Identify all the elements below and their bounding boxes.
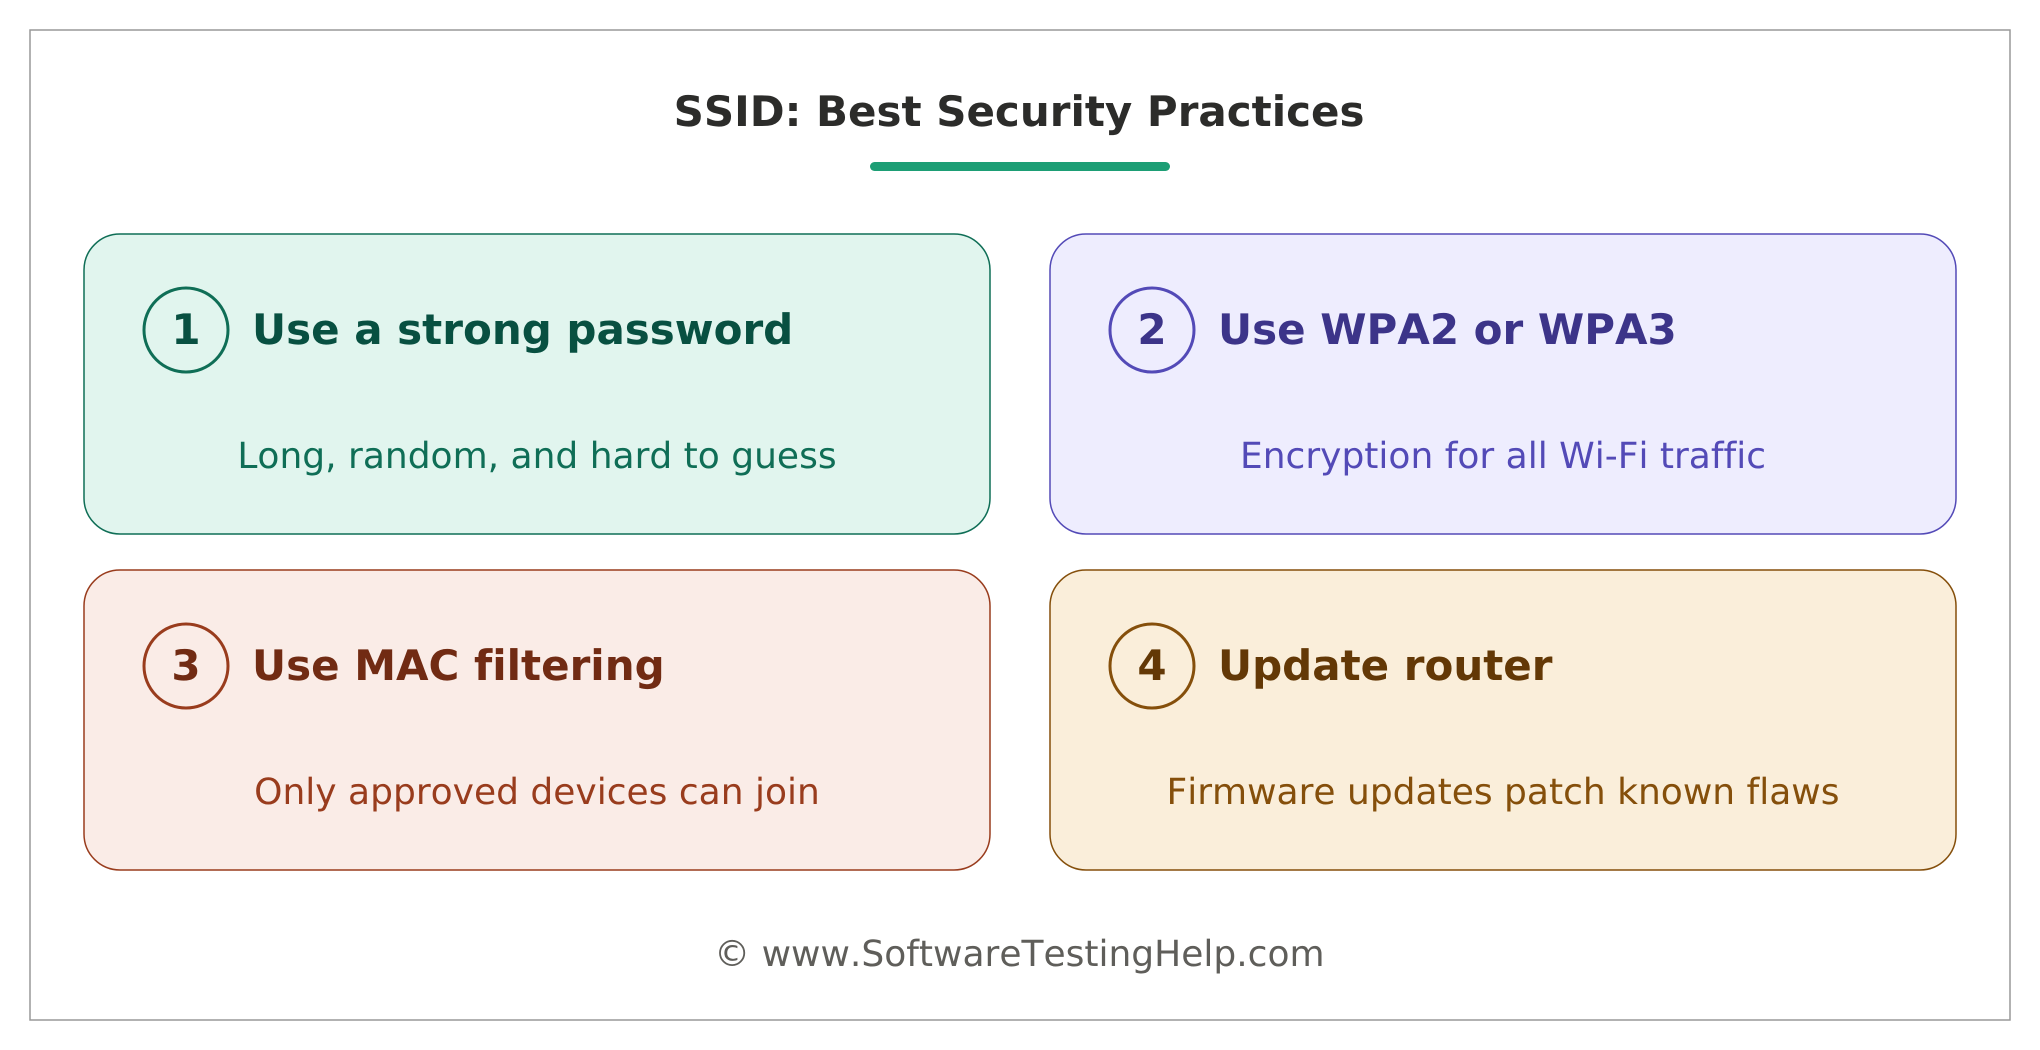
footer copyright: © www.SoftwareTestingHelp.com <box>714 933 1325 975</box>
heading 3: Use MAC filtering <box>252 644 665 692</box>
title underline <box>870 162 1170 171</box>
heading 4: Update router <box>1218 644 1553 692</box>
title: SSID: Best Security Practices <box>674 90 1365 138</box>
number badge 1 <box>144 288 228 372</box>
number badge 3: 3 <box>171 644 201 692</box>
panel: use a strong password <box>84 234 990 534</box>
number badge 4 <box>1110 624 1194 708</box>
number badge 3 <box>144 624 228 708</box>
number badge 2 <box>1110 288 1194 372</box>
description 4: Firmware updates patch known flaws <box>1167 771 1839 813</box>
number badge 2: 2 <box>1137 308 1167 356</box>
number badge 1: 1 <box>171 308 201 356</box>
description 2: Encryption for all Wi-Fi traffic <box>1240 435 1766 477</box>
card background 4 <box>1050 570 1956 870</box>
panel: use MAC filtering <box>84 570 990 870</box>
panel: update router <box>1050 570 1956 870</box>
description 3: Only approved devices can join <box>254 771 820 813</box>
heading 2: Use WPA2 or WPA3 <box>1218 308 1677 356</box>
card background 3 <box>84 570 990 870</box>
number badge 4: 4 <box>1137 644 1167 692</box>
panel: use WPA2 or WPA3 <box>1050 234 1956 534</box>
description 1: Long, random, and hard to guess <box>237 435 837 477</box>
card background 2 <box>1050 234 1956 534</box>
card background 1 <box>84 234 990 534</box>
heading 1: Use a strong password <box>252 308 793 356</box>
